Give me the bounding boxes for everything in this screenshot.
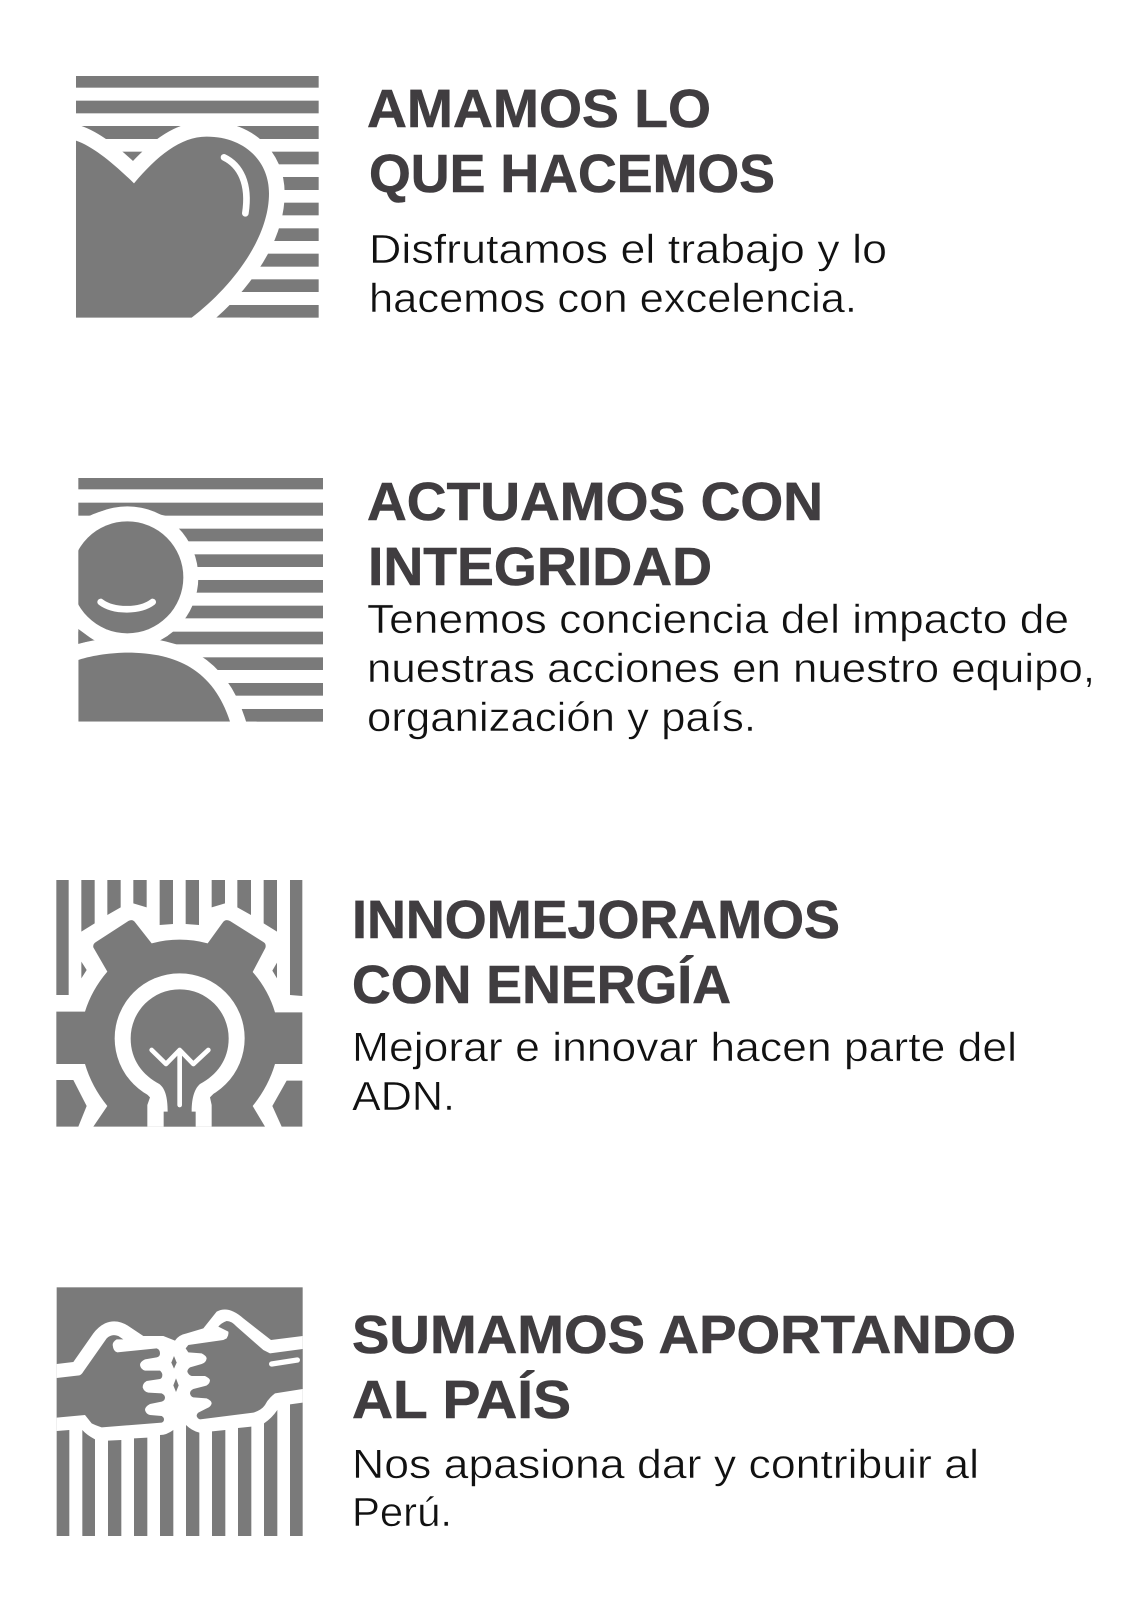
right fist	[186, 1321, 303, 1419]
heading: actuamos con integridad: ACTUAMOS CON	[367, 472, 823, 532]
panel: sumamos aportando al pais	[57, 1287, 1016, 1536]
text: mejorar e innovar	[352, 1024, 1017, 1119]
knuckle gap lower	[173, 1378, 179, 1392]
heading: amamos lo que hacemos: AMAMOS LO	[367, 79, 711, 139]
heading: sumamos aportando al pais	[352, 1305, 1016, 1430]
text: tenemos conciencia	[367, 596, 1095, 740]
icon: fist bump	[57, 1287, 303, 1536]
text: disfrutamos	[369, 226, 887, 321]
text: mejorar e innovar: ADN.	[352, 1073, 455, 1119]
text: nos apasiona: Nos apasiona dar y contribuir al	[352, 1441, 979, 1487]
heading: actuamos con integridad: INTEGRIDAD	[368, 537, 712, 597]
panel: actuamos con integridad	[56, 472, 1095, 742]
panel: innomejoramos con energia	[56, 880, 1017, 1127]
text: mejorar e innovar: Mejorar e innovar hacen parte del	[352, 1024, 1017, 1070]
text: tenemos conciencia: organización y país.	[367, 694, 756, 740]
heading: innomejoramos con energia: CON ENERGÍA	[352, 955, 731, 1015]
text: tenemos conciencia: nuestras acciones en nuestro equipo,	[367, 645, 1095, 691]
heading: amamos lo que hacemos: QUE HACEMOS	[369, 144, 775, 204]
knuckle gap	[171, 1356, 177, 1369]
text: disfrutamos: Disfrutamos el trabajo y lo	[369, 226, 887, 272]
left fist	[57, 1335, 165, 1427]
text: disfrutamos: hacemos con excelencia.	[369, 275, 857, 321]
heading: innomejoramos con energia: INNOMEJORAMOS	[352, 890, 840, 950]
panel: amamos lo que hacemos	[50, 76, 887, 338]
heading: innomejoramos con energia	[352, 890, 840, 1015]
icon: gear with light bulb	[56, 880, 302, 1127]
heading: amamos lo que hacemos	[367, 79, 775, 204]
heading: sumamos aportando al pais: SUMAMOS APORTANDO	[352, 1305, 1016, 1365]
text: tenemos conciencia: Tenemos conciencia del impacto de	[367, 596, 1069, 642]
icon: heart	[50, 76, 319, 338]
heading: sumamos aportando al pais: AL PAÍS	[352, 1370, 571, 1430]
text: nos apasiona: Perú.	[352, 1489, 452, 1535]
text: nos apasiona	[352, 1441, 979, 1535]
heading: actuamos con integridad	[367, 472, 823, 597]
icon: person	[78, 478, 323, 722]
